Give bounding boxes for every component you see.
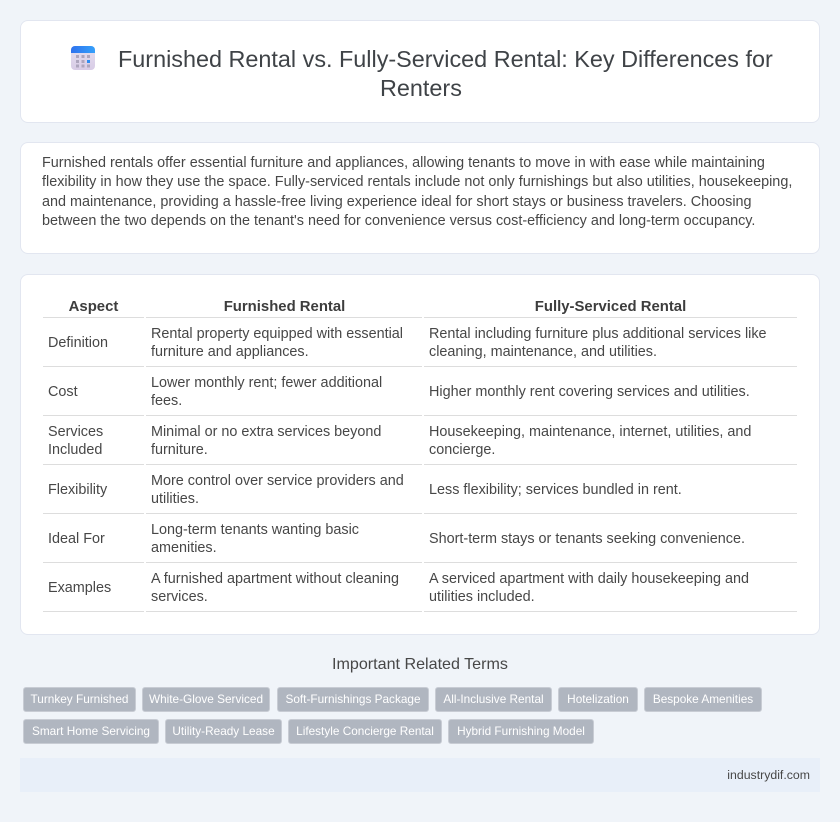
cell: services furnished: Minimal or no extra services beyond <box>151 424 381 440</box>
cell: definition furnished <box>151 326 403 360</box>
cell: ideal furnished: amenities. <box>151 540 217 556</box>
row: services included: Services <box>48 424 103 440</box>
text block: intro: Furnished rentals offer essential furniture and appliances, allowing tenants to move in with ease while maintaining <box>42 155 765 171</box>
cell: examples serviced: A serviced apartment with daily housekeeping and <box>429 571 749 587</box>
footer <box>20 758 820 792</box>
text block: intro: flexibility in how they use the space. Fully-serviced rentals include not only furnishings but also utilities, housekeeping, <box>42 174 792 190</box>
cell: services serviced: concierge. <box>429 442 495 458</box>
cell: services furnished: furniture. <box>151 442 208 458</box>
cell: examples furnished: services. <box>151 589 208 605</box>
cell: flexibility furnished: utilities. <box>151 491 199 507</box>
text block: intro: between the two depends on the tenant's need for convenience versus cost-efficiency and long-term occupancy. <box>42 213 755 229</box>
row: definition: Definition <box>48 335 108 351</box>
cell: definition furnished: furniture and appliances. <box>151 344 309 360</box>
tags: related terms: Hybrid Furnishing Model <box>457 724 585 738</box>
row: services included: Included <box>48 442 102 458</box>
title: Furnished Rental vs. Fully-Serviced Rental: Key Differences for <box>118 46 773 72</box>
cell: cost furnished <box>151 375 382 409</box>
table header: furnished rental: Furnished Rental <box>224 299 345 315</box>
table header: fully-serviced rental: Fully-Serviced Rental <box>535 299 686 315</box>
row: services included <box>48 424 103 458</box>
cell: examples serviced <box>429 571 749 605</box>
row: ideal for: Ideal For <box>48 531 105 547</box>
panel: comparison table <box>20 274 820 635</box>
cell: definition furnished: Rental property equipped with essential <box>151 326 403 342</box>
row: cost: Cost <box>48 384 78 400</box>
tags: related terms: Soft-Furnishings Package <box>285 692 421 706</box>
cell: flexibility serviced: Less flexibility; services bundled in rent. <box>429 482 682 498</box>
text block: intro: and maintenance, providing a hassle-free living experience ideal for short stays or business travelers. Choosing <box>42 194 752 210</box>
row: examples: Examples <box>48 580 111 596</box>
tags: related terms: White-Glove Serviced <box>149 692 263 706</box>
row: flexibility: Flexibility <box>48 482 107 498</box>
cell: services serviced <box>429 424 751 458</box>
cell: definition serviced: cleaning, maintenance, and utilities. <box>429 344 657 360</box>
cell: definition serviced <box>429 326 767 360</box>
cell: ideal serviced: Short-term stays or tenants seeking convenience. <box>429 531 745 547</box>
text block: intro <box>42 155 792 229</box>
cell: services furnished <box>151 424 381 458</box>
cell: definition serviced: Rental including furniture plus additional services like <box>429 326 767 342</box>
heading: related terms: Important Related Terms <box>332 655 508 673</box>
panel: intro paragraph <box>20 142 820 254</box>
cell: cost furnished: Lower monthly rent; fewer additional <box>151 375 382 391</box>
cell: flexibility furnished <box>151 473 404 507</box>
table header: aspect: Aspect <box>69 299 118 315</box>
cell: examples furnished: A furnished apartment without cleaning <box>151 571 399 587</box>
cell: examples furnished <box>151 571 399 605</box>
tags: related terms: Lifestyle Concierge Rental <box>296 724 434 738</box>
title <box>118 46 773 101</box>
tags: related terms: Smart Home Servicing <box>32 724 150 738</box>
cell: ideal furnished: Long-term tenants wanting basic <box>151 522 359 538</box>
cell: cost furnished: fees. <box>151 393 182 409</box>
cell: services serviced: Housekeeping, maintenance, internet, utilities, and <box>429 424 751 440</box>
cell: examples serviced: utilities included. <box>429 589 535 605</box>
tags: related terms <box>23 687 762 744</box>
cell: ideal furnished <box>151 522 359 556</box>
title: Renters <box>380 75 462 101</box>
tags: related terms: Utility-Ready Lease <box>172 724 275 738</box>
footer: source: industrydif.com <box>727 768 810 782</box>
tags: related terms: Bespoke Amenities <box>653 692 753 706</box>
tags: related terms: Turnkey Furnished <box>31 692 128 706</box>
icon: calendar <box>71 46 95 70</box>
tags: related terms: Hotelization <box>567 692 629 706</box>
panel: title card <box>20 20 820 123</box>
tags: related terms: All-Inclusive Rental <box>443 692 544 706</box>
cell: flexibility furnished: More control over service providers and <box>151 473 404 489</box>
cell: cost serviced: Higher monthly rent covering services and utilities. <box>429 384 750 400</box>
